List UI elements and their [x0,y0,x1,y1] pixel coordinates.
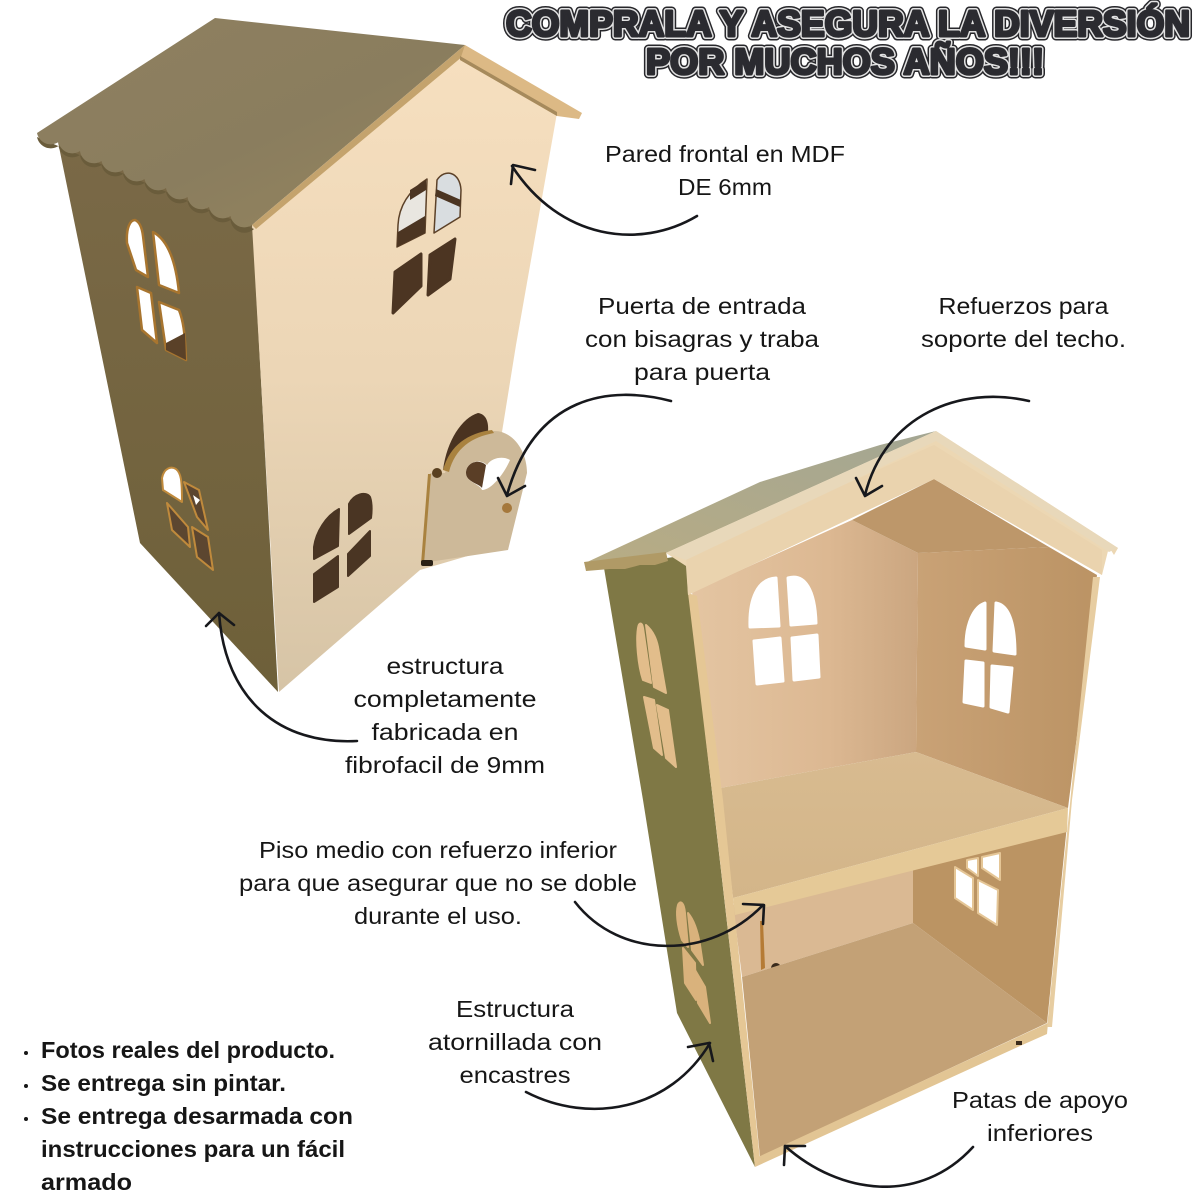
label: pared frontal: DE 6mm [678,174,772,200]
lower floor [742,923,1047,1157]
label: piso medio [239,837,637,929]
left side wall [58,142,278,692]
front upper window [393,173,461,313]
label: puerta de entrada: para puerta [634,359,770,385]
door heart window [466,458,510,490]
upper right wall [916,547,1097,808]
label: piso medio: durante el uso. [354,903,522,929]
bullet list: Se entrega desarmada con [41,1103,353,1129]
side lower window [162,468,213,570]
title light outline: COMPRALA Y ASEGURA LA DIVERSIÓN [506,2,1190,44]
lower right wall windows [955,853,1000,925]
roof scalloped edge shadow [37,137,254,233]
middle floor [720,752,1068,898]
bullet list: Se entrega sin pintar. [41,1070,286,1096]
roof scalloped edge [584,552,668,571]
side wall lower windows [677,902,710,1023]
bullet list [24,1037,353,1195]
label: estructura atornillada [428,996,602,1088]
photo: open house interior [584,431,1118,1167]
arrow: estructura [206,613,357,741]
arrow: refuerzos [856,397,1029,496]
bullet list: instrucciones para un fácil [41,1136,345,1162]
label: piso medio: para que asegurar que no se doble [239,870,637,896]
left front edge strip [688,593,760,1167]
label: pared frontal: Pared frontal en MDF [605,141,845,167]
arrow: pared frontal [511,165,697,235]
label: refuerzos: Refuerzos para [938,293,1109,319]
photo: closed house exterior [37,18,582,692]
label: patas de apoyo: Patas de apoyo [952,1087,1128,1113]
right front edge strip [1047,577,1100,1027]
title light outline: POR MUCHOS AÑOS!!! [646,40,1044,82]
title fill text: POR MUCHOS AÑOS!!! [646,40,1044,82]
title light outline [506,2,1190,82]
label: estructura atornillada: atornillada con [428,1029,602,1055]
door leaf [422,431,527,563]
label: piso medio: Piso medio con refuerzo inferior [259,837,617,863]
front wall with roof gable [252,58,557,692]
title outer outline: POR MUCHOS AÑOS!!! [646,40,1044,82]
hinges and knob [432,468,442,478]
bullet list: armado [41,1169,132,1195]
front gable fascia [666,431,1118,595]
title fill text: COMPRALA Y ASEGURA LA DIVERSIÓN [506,2,1190,44]
door opening [443,413,488,470]
support foot [1016,1041,1022,1045]
fascia lower tone [686,445,1102,595]
arrow: puerta [498,395,671,496]
arrow: piso medio [575,902,764,946]
label: estructura [345,653,545,778]
label: patas de apoyo [952,1087,1128,1146]
lower back wall [733,865,913,977]
label: puerta de entrada: con bisagras y traba [585,326,819,352]
roof surface [585,431,936,563]
title fill text [506,2,1190,82]
side wall upper windows [637,624,676,767]
roof right fascia [460,45,582,119]
side wall exterior [604,555,755,1167]
front lower window [314,494,372,602]
upper back wall windows [750,577,819,684]
fascia roof trim [666,431,1118,560]
lower back reinforcement and bolt [760,921,765,970]
title outer outline [506,2,1190,82]
label: estructura atornillada: Estructura [456,996,574,1022]
upper back wall [692,520,918,788]
bullet list: Fotos reales del producto. [41,1037,335,1063]
label: refuerzos: soporte del techo. [921,326,1126,352]
label: estructura: fibrofacil de 9mm [345,752,545,778]
bottom front edge [755,1023,1048,1167]
upper right wall windows [964,603,1015,712]
middle floor front band [733,808,1068,915]
title outer outline: COMPRALA Y ASEGURA LA DIVERSIÓN [506,2,1190,44]
title [506,2,1190,82]
door edge [421,430,494,564]
roof front edge [252,45,469,229]
fascia shadow line [460,56,557,116]
label: puerta de entrada [585,293,819,385]
label: estructura: estructura [386,653,504,679]
label: puerta de entrada: Puerta de entrada [598,293,806,319]
label: refuerzos [921,293,1126,352]
label: patas de apoyo: inferiores [987,1120,1093,1146]
label: estructura: fabricada en [372,719,518,745]
label: estructura: completamente [354,686,536,712]
arrow: estructura atornillada [526,1043,713,1109]
label: pared frontal [605,141,845,200]
label: estructura atornillada: encastres [460,1062,570,1088]
arrow: patas [784,1146,973,1187]
side upper window [127,220,186,360]
roof top surface [37,18,465,227]
ceiling [852,479,1049,553]
lower right wall [913,825,1067,1023]
